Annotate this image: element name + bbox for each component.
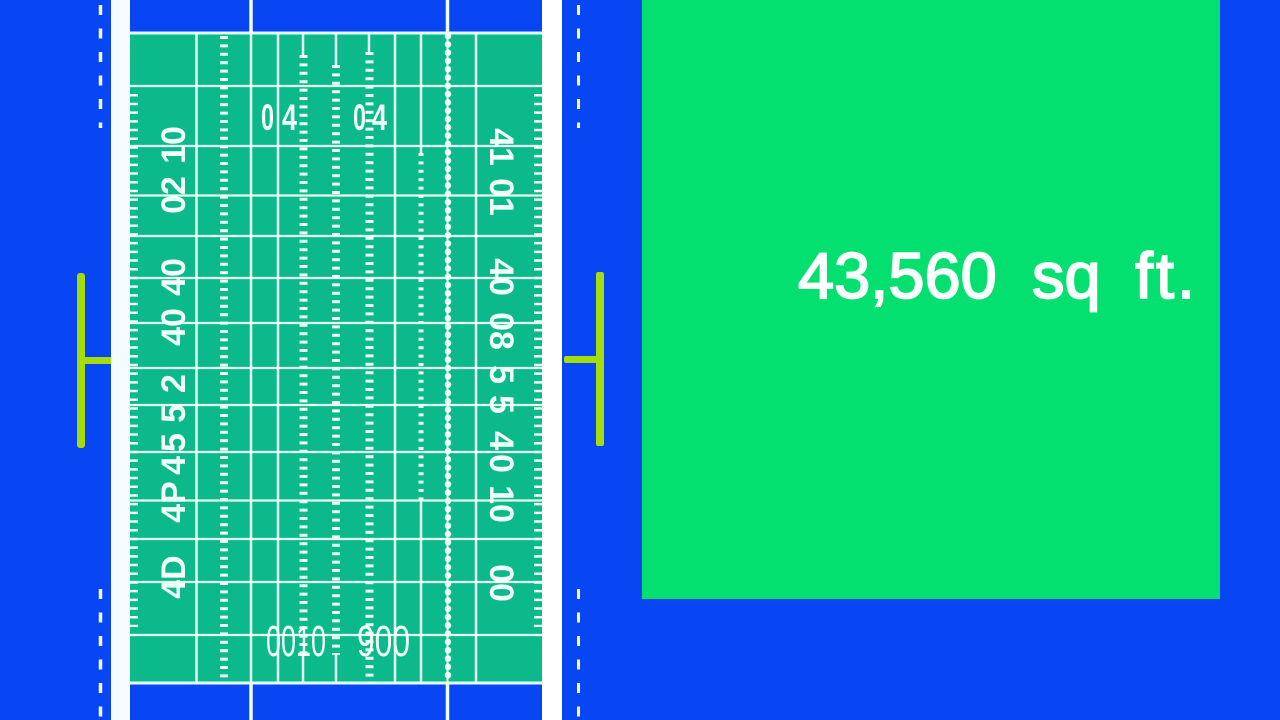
- yard numbers left: 4P: [155, 481, 193, 523]
- area label: ft.: [1135, 239, 1195, 312]
- hash marks: [224, 36, 421, 683]
- end zone numbers top: 4: [372, 97, 387, 138]
- dashed boundary left top: [99, 5, 102, 128]
- yard numbers right: 08: [482, 312, 520, 350]
- yard numbers left: 02: [155, 176, 193, 214]
- sideline right: [542, 0, 562, 720]
- end zone numbers bottom: 0010: [266, 617, 326, 666]
- area label: 43,560: [798, 239, 997, 312]
- dashed boundary right bottom: [577, 589, 580, 720]
- panel: football field: [111, 0, 562, 720]
- yard numbers left: 45: [155, 429, 193, 475]
- yard numbers left: 40: [155, 308, 193, 346]
- yard numbers left: 52: [155, 363, 193, 423]
- end zone numbers top: 0: [353, 97, 366, 138]
- panel: one acre square: [642, 0, 1220, 599]
- yard numbers right: 41: [482, 128, 520, 166]
- dashed boundary right top: [577, 5, 580, 128]
- end zone numbers bottom: [266, 617, 410, 666]
- yard numbers right: [482, 128, 520, 602]
- horizontal yard lines: [130, 33, 542, 683]
- yard numbers left: 10: [155, 126, 193, 164]
- end zone numbers bottom: 900: [357, 617, 410, 666]
- end zone numbers top: 4: [282, 97, 297, 138]
- area label: sq: [1032, 239, 1101, 312]
- yard numbers left: 40: [155, 258, 193, 296]
- goalpost left: [77, 273, 111, 448]
- dashed boundary left bottom: [99, 589, 102, 720]
- yard numbers right: 40: [482, 258, 520, 296]
- yard numbers left: [155, 126, 193, 599]
- end zone posts lines above and below field: [251, 0, 448, 720]
- vertical solid lines: [196, 33, 476, 683]
- yard numbers right: 00: [482, 564, 520, 602]
- dotted inbound line: [445, 36, 451, 683]
- sideline ticks left: [130, 94, 138, 627]
- yard numbers right: 55: [482, 365, 520, 425]
- sideline ticks right: [534, 94, 542, 627]
- yard numbers left: 4D: [155, 555, 193, 599]
- yard numbers right: 10: [482, 485, 520, 523]
- end zone numbers top: [261, 97, 387, 138]
- goalpost right: [564, 272, 604, 446]
- end zone numbers top: 0: [261, 97, 274, 138]
- yard numbers right: 40: [482, 431, 520, 477]
- yard numbers right: 01: [482, 178, 520, 216]
- sideline left: [111, 0, 130, 720]
- turf: [130, 33, 542, 683]
